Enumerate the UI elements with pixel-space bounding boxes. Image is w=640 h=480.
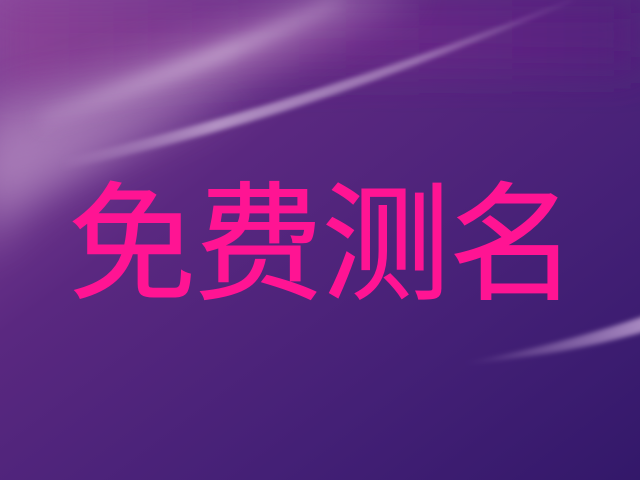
title: 免费测名 (68, 174, 576, 317)
